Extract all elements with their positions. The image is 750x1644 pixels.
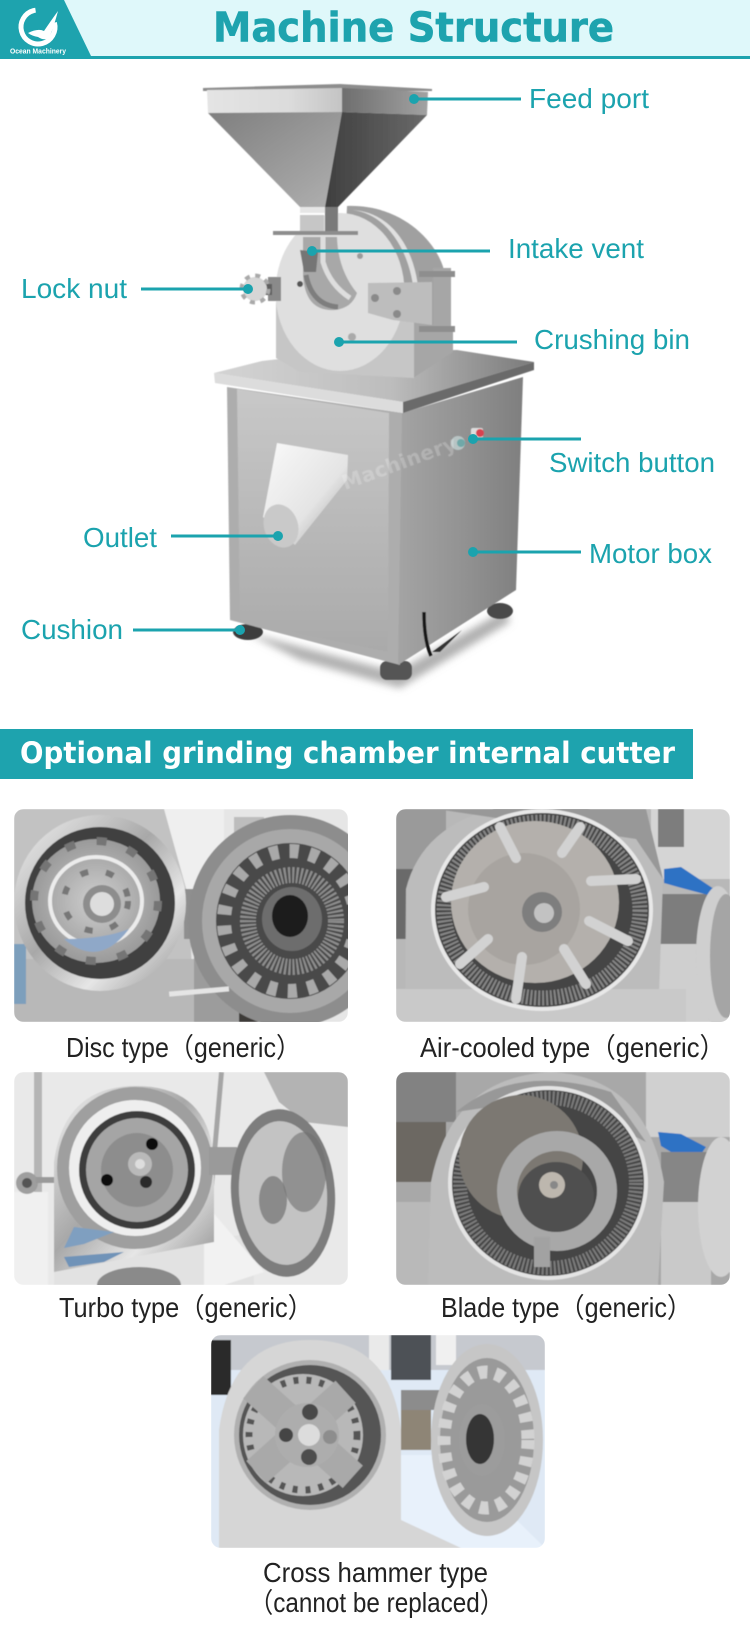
bolts xyxy=(357,253,363,259)
callout: Crushing bin xyxy=(334,324,690,355)
photo: disc type xyxy=(14,809,348,1022)
neck and flange xyxy=(325,207,338,232)
callout: Motor box: Motor box xyxy=(589,538,712,569)
rear shell xyxy=(340,206,453,377)
section banner xyxy=(0,729,693,779)
photo: blade type xyxy=(396,1072,744,1285)
front disc xyxy=(276,213,404,371)
callout: Outlet: Outlet xyxy=(83,522,157,553)
caption: disc type: Disc type（generic） xyxy=(66,1032,301,1063)
section banner: Optional grinding chamber internal cutter xyxy=(20,736,676,770)
callout: Cushion: Cushion xyxy=(21,614,123,645)
callout: Switch button: Switch button xyxy=(549,447,715,478)
elbow pipe xyxy=(303,237,357,310)
cabinet xyxy=(227,387,403,665)
title: Machine Structure xyxy=(213,4,614,52)
cross hammer xyxy=(243,1376,363,1488)
photo: turbo type xyxy=(14,1072,348,1303)
buttons xyxy=(451,436,465,450)
table top xyxy=(214,350,534,402)
header bar xyxy=(0,0,750,59)
caption: turbo type: Turbo type（generic） xyxy=(59,1292,313,1323)
callout: Intake vent: Intake vent xyxy=(508,233,644,264)
callout: Switch button xyxy=(468,434,715,478)
cable xyxy=(424,612,431,656)
callout: Intake vent xyxy=(307,233,644,264)
callout: Lock nut: Lock nut xyxy=(21,273,127,304)
caption: blade type: Blade type（generic） xyxy=(441,1292,692,1323)
callout: Outlet xyxy=(83,522,283,553)
floor shadow xyxy=(245,610,510,688)
photo: air-cooled type xyxy=(396,801,742,1026)
logo badge xyxy=(0,0,91,56)
hopper xyxy=(203,84,432,91)
machine illustration xyxy=(203,84,534,688)
caption: cross hammer type: Cross hammer type xyxy=(263,1557,488,1588)
hinge plate xyxy=(368,282,432,325)
callout: Feed port: Feed port xyxy=(529,83,649,114)
caption: cross hammer type: （cannot be replaced） xyxy=(249,1587,504,1618)
fan blades xyxy=(446,827,636,999)
lower housing xyxy=(413,320,453,378)
callout: Lock nut xyxy=(21,273,253,304)
watermark: Machinery xyxy=(339,431,459,495)
callout: Motor box xyxy=(468,538,712,569)
logo badge: Ocean Machinery xyxy=(10,46,67,56)
photo: cross hammer type xyxy=(211,1335,545,1548)
feet xyxy=(233,624,263,640)
outlet chute xyxy=(263,443,348,545)
caption: air-cooled type: Air-cooled type（generic） xyxy=(420,1032,725,1063)
callout: Cushion xyxy=(21,614,245,645)
caption: cross hammer type xyxy=(249,1557,504,1618)
lock nut xyxy=(268,277,281,301)
callout: Crushing bin: Crushing bin xyxy=(534,324,690,355)
callout: Feed port xyxy=(409,83,649,114)
